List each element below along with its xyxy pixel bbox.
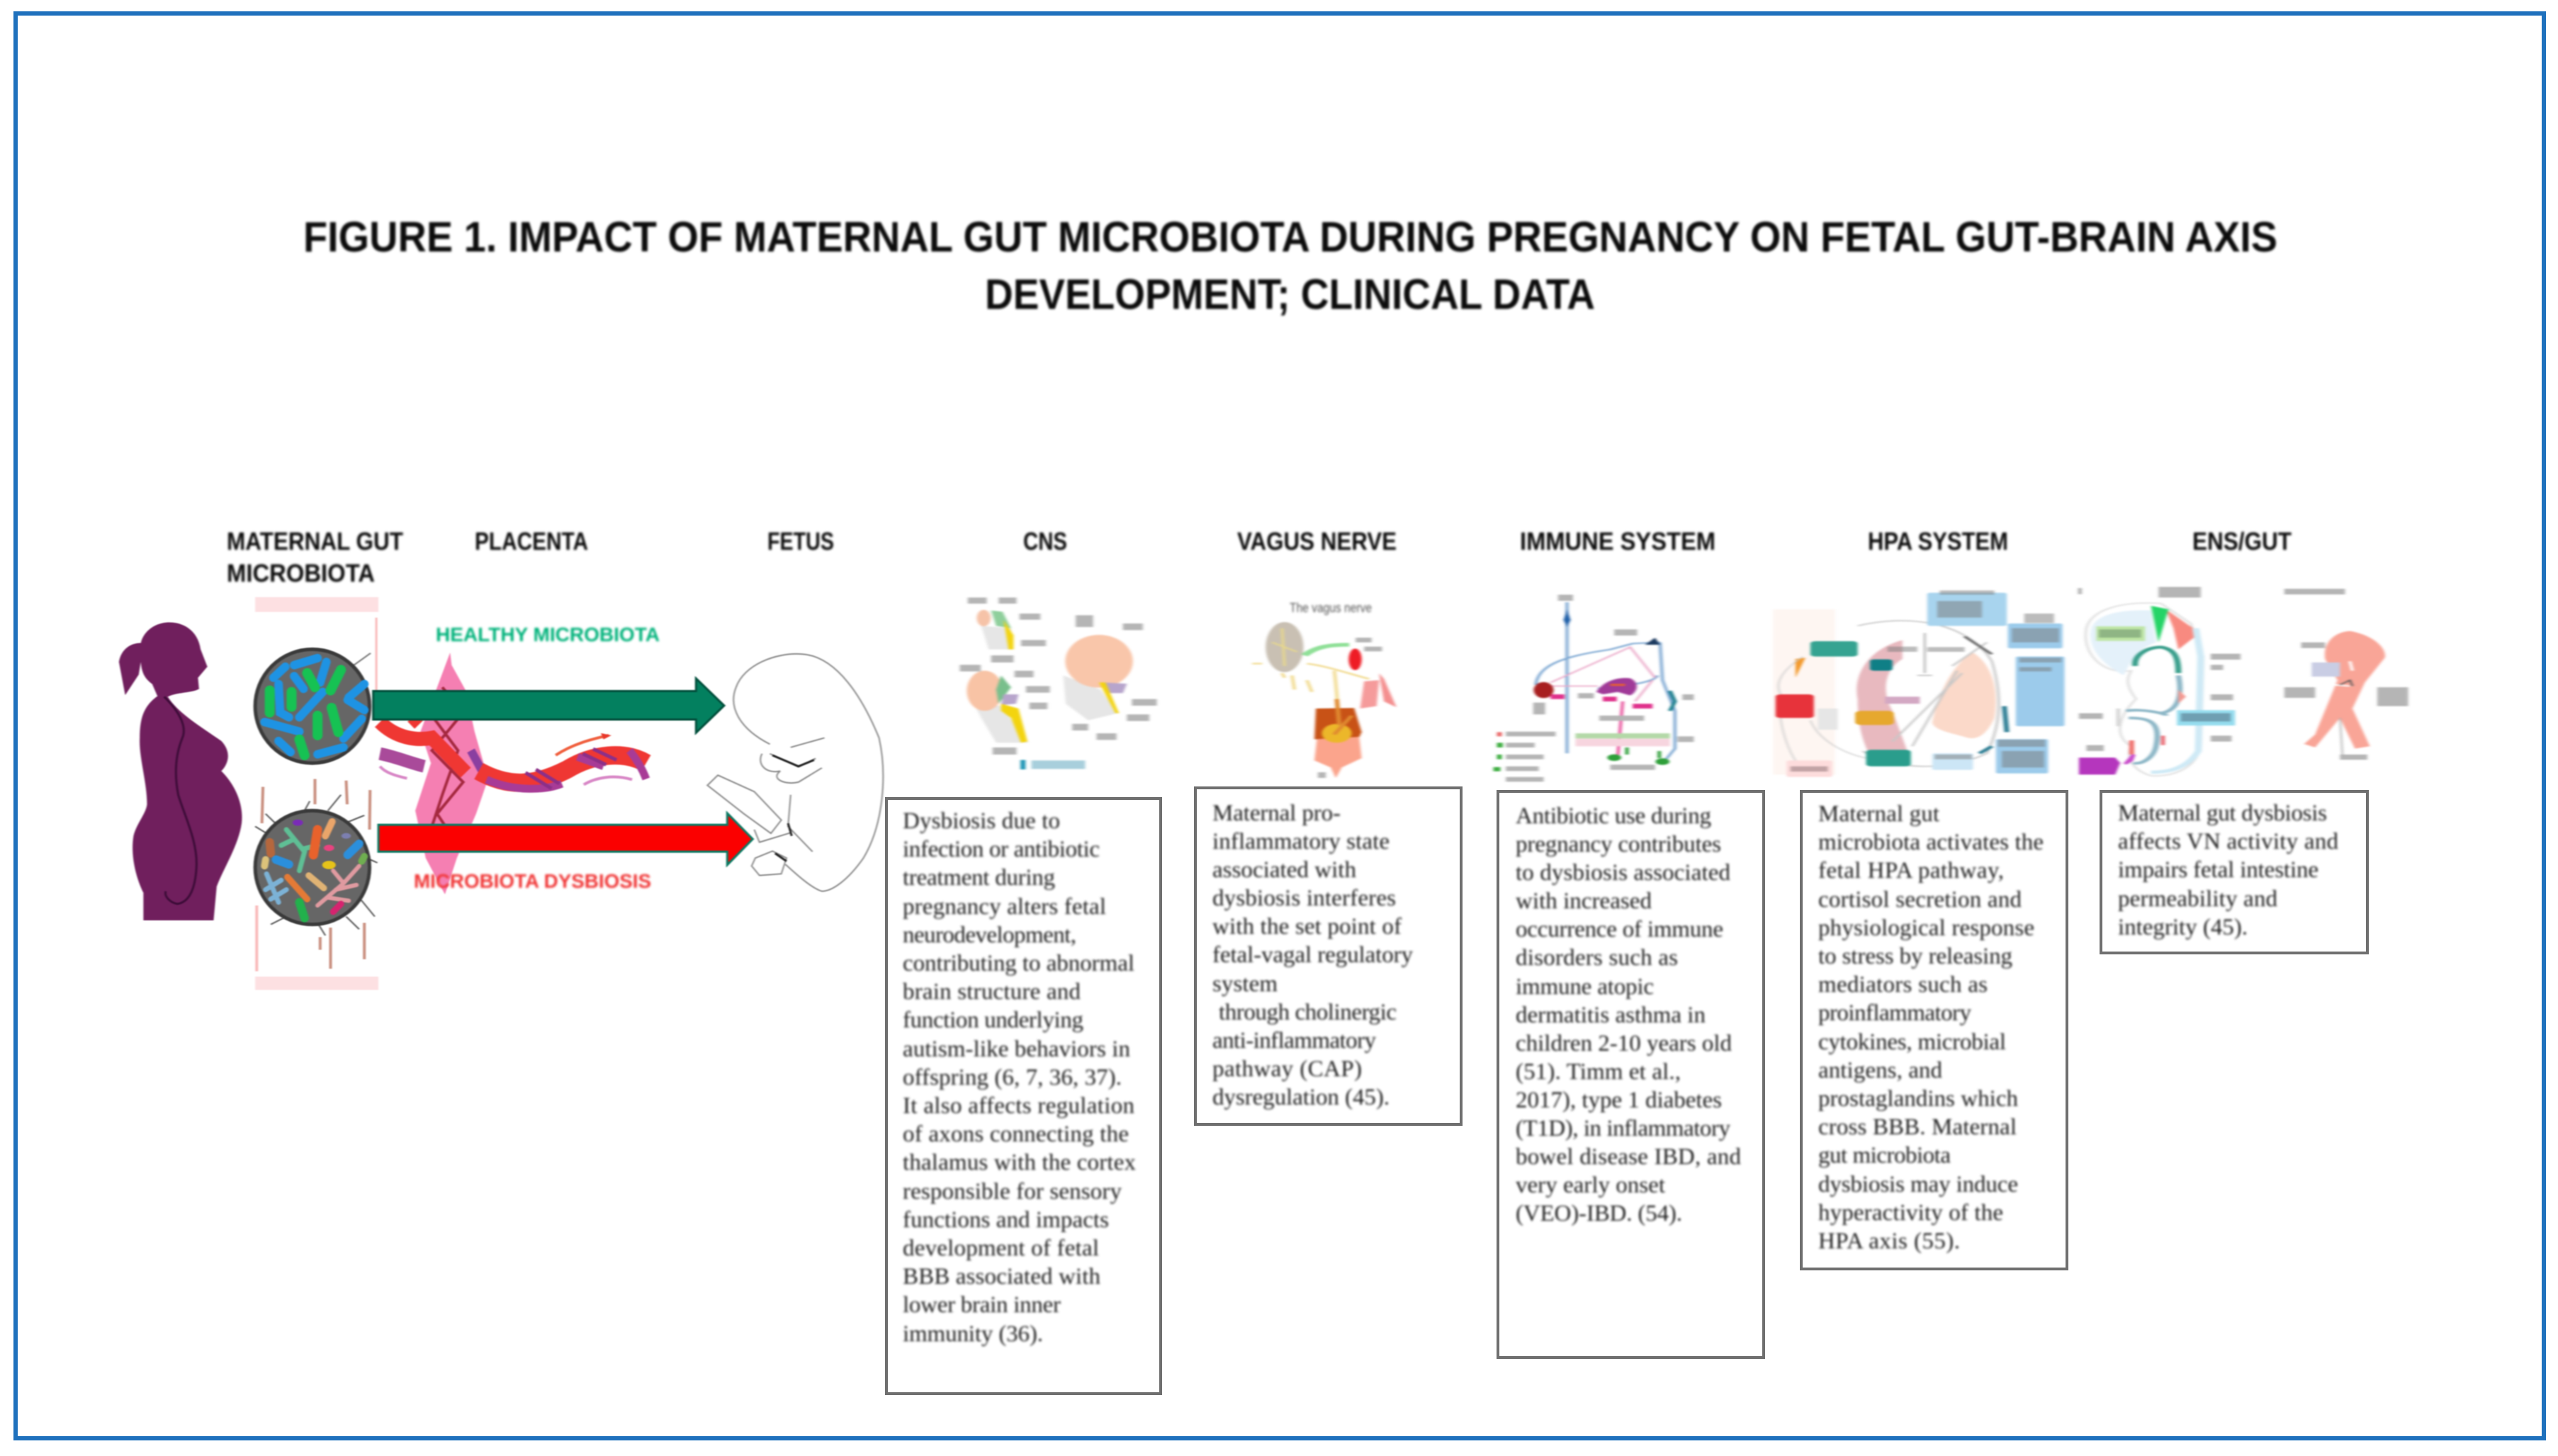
text: immune system findings: children 2-10 years old xyxy=(1516,1031,1732,1056)
illustration: vagus nerve anatomy xyxy=(1252,622,1397,778)
text: immune system findings: bowel disease IBD, and xyxy=(1516,1144,1742,1170)
text: vagus nerve findings: anti-inflammatory xyxy=(1212,1028,1376,1054)
text: CNS findings: lower brain inner xyxy=(903,1292,1061,1318)
icon: dysbiosis microbiota circle xyxy=(255,779,378,969)
text: CNS findings: functions and impacts xyxy=(903,1207,1109,1233)
text: vagus nerve findings: with the set point of xyxy=(1212,914,1402,939)
text: ENS/gut findings: permeability and xyxy=(2118,886,2277,912)
text: vagus nerve findings xyxy=(1212,801,1413,1110)
icon: pink side line lower xyxy=(255,905,258,971)
label: the vagus nerve: The vagus nerve xyxy=(1290,601,1372,615)
icon: fetus outline xyxy=(707,654,883,891)
column headings xyxy=(227,528,2292,587)
text: HPA system findings: to stress by releasing xyxy=(1818,944,2012,969)
text: CNS findings: autism-like behaviors in xyxy=(903,1037,1130,1062)
illustration: ENS and gut development xyxy=(2078,587,2408,776)
column headings: VAGUS NERVE xyxy=(1237,528,1397,555)
text: CNS findings: Dysbiosis due to xyxy=(903,808,1060,834)
title: DEVELOPMENT; CLINICAL DATA xyxy=(985,271,1595,318)
icon: placenta xyxy=(380,653,646,894)
text: vagus nerve findings: dysregulation (45). xyxy=(1212,1085,1390,1110)
text: HPA system findings: microbiota activates the xyxy=(1818,830,2044,855)
column headings: HPA SYSTEM xyxy=(1868,528,2008,555)
text: vagus nerve findings: inflammatory state xyxy=(1212,829,1390,854)
text: CNS findings: of axons connecting the xyxy=(903,1122,1129,1147)
panel: vagus nerve xyxy=(1195,788,1461,1124)
text: HPA system findings: cytokines, microbial xyxy=(1818,1029,2006,1055)
text: HPA system findings: physiological response xyxy=(1818,915,2034,941)
text: immune system findings: occurrence of immune xyxy=(1516,917,1723,942)
text: immune system findings: very early onset xyxy=(1516,1173,1665,1198)
arrow: healthy microbiota xyxy=(373,678,724,733)
text: immune system findings: 2017), type 1 diabetes xyxy=(1516,1088,1722,1113)
text: HPA system findings: cross BBB. Maternal xyxy=(1818,1114,2017,1140)
text: CNS findings xyxy=(903,808,1137,1347)
text: HPA system findings: HPA axis (55). xyxy=(1818,1229,1960,1254)
text: ENS/gut findings: integrity (45). xyxy=(2118,915,2248,940)
text: immune system findings: disorders such as xyxy=(1516,945,1678,971)
text: vagus nerve findings: system xyxy=(1212,971,1278,997)
label: healthy microbiota: HEALTHY MICROBIOTA xyxy=(436,623,660,645)
text: immune system findings: (51). Timm et al., xyxy=(1516,1059,1681,1085)
text: CNS findings: immunity (36). xyxy=(903,1321,1043,1347)
text: immune system findings: (VEO)-IBD. (54). xyxy=(1516,1201,1682,1226)
text: immune system findings: pregnancy contributes xyxy=(1516,832,1721,857)
left illustration: pregnant woman, microbiota, placenta xyxy=(119,597,883,990)
panel: CNS xyxy=(886,798,1161,1394)
text: HPA system findings: prostaglandins which xyxy=(1818,1086,2018,1112)
panel: ENS/gut xyxy=(2101,791,2367,953)
illustration: CNS brain development xyxy=(960,597,1156,769)
column headings: ENS/GUT xyxy=(2192,528,2292,555)
label: microbiota dysbiosis: MICROBIOTA DYSBIOSIS xyxy=(414,870,651,892)
text: HPA system findings: cortisol secretion and xyxy=(1818,887,2022,913)
column headings: PLACENTA xyxy=(475,528,588,555)
text: vagus nerve findings: pathway (CAP) xyxy=(1212,1056,1362,1082)
text: CNS findings: It also affects regulation xyxy=(903,1093,1134,1119)
icon: pink side line upper xyxy=(376,618,378,700)
panel: immune system xyxy=(1498,791,1764,1358)
text: immune system findings: with increased xyxy=(1516,888,1652,914)
text: ENS/gut findings: impairs fetal intestine xyxy=(2118,857,2318,883)
text: CNS findings: contributing to abnormal xyxy=(903,951,1134,976)
text: vagus nerve findings: Maternal pro- xyxy=(1212,801,1341,826)
text: CNS findings: pregnancy alters fetal xyxy=(903,894,1106,920)
title: FIGURE 1. IMPACT OF MATERNAL GUT MICROBIOTA DURING PREGNANCY ON FETAL GUT-BRAIN AXIS xyxy=(303,213,2277,261)
text: immune system findings xyxy=(1516,803,1742,1226)
text: HPA system findings: Maternal gut xyxy=(1818,801,1939,827)
text: CNS findings: function underlying xyxy=(903,1008,1083,1033)
column headings: IMMUNE SYSTEM xyxy=(1520,528,1715,555)
text: HPA system findings: antigens, and xyxy=(1818,1058,1943,1083)
text: immune system findings: Antibiotic use during xyxy=(1516,803,1711,829)
icon: pink band top xyxy=(255,597,378,612)
panel: HPA system xyxy=(1801,791,2067,1269)
icon: pregnant woman silhouette xyxy=(119,622,242,920)
text: HPA system findings: hyperactivity of the xyxy=(1818,1200,2003,1226)
text: immune system findings: dermatitis asthma in xyxy=(1516,1003,1706,1028)
icon: healthy microbiota circle xyxy=(255,649,371,763)
title xyxy=(303,213,2277,318)
text: CNS findings: brain structure and xyxy=(903,979,1081,1005)
text: vagus nerve findings: dysbiosis interferes xyxy=(1212,886,1396,911)
text: CNS findings: responsible for sensory xyxy=(903,1179,1122,1204)
text: HPA system findings: fetal HPA pathway, xyxy=(1818,858,2004,884)
text: CNS findings: offspring (6, 7, 36, 37). xyxy=(903,1065,1122,1090)
illustration: immune system circuit xyxy=(1494,594,1694,781)
text: ENS/gut findings: affects VN activity and xyxy=(2118,829,2338,854)
text: vagus nerve findings: associated with xyxy=(1212,857,1356,883)
text: HPA system findings xyxy=(1818,801,2044,1254)
icon: pink band bottom xyxy=(255,976,378,990)
text: CNS findings: thalamus with the cortex xyxy=(903,1150,1137,1175)
text: ENS/gut findings xyxy=(2118,801,2338,940)
text: HPA system findings: proinflammatory xyxy=(1818,1000,1971,1026)
text: immune system findings: to dysbiosis associated xyxy=(1516,860,1730,886)
text: HPA system findings: gut microbiota xyxy=(1818,1143,1951,1168)
text: immune system findings: (T1D), in inflammatory xyxy=(1516,1116,1730,1141)
text: CNS findings: development of fetal xyxy=(903,1236,1099,1261)
text: CNS findings: infection or antibiotic xyxy=(903,837,1100,862)
column headings: MICROBIOTA xyxy=(227,560,375,587)
text: vagus nerve findings: fetal-vagal regulatory xyxy=(1212,942,1413,968)
arrow: microbiota dysbiosis xyxy=(378,813,753,865)
text: CNS findings: BBB associated with xyxy=(903,1264,1101,1289)
text: HPA system findings: mediators such as xyxy=(1818,972,1988,998)
column headings: MATERNAL GUT xyxy=(227,528,403,555)
text: CNS findings: neurodevelopment, xyxy=(903,922,1076,948)
text: HPA system findings: dysbiosis may induce xyxy=(1818,1172,2018,1197)
illustration: HPA system xyxy=(1773,590,2065,777)
text: immune system findings: immune atopic xyxy=(1516,974,1654,1000)
column headings: CNS xyxy=(1023,528,1067,555)
text: ENS/gut findings: Maternal gut dysbiosis xyxy=(2118,801,2327,826)
text: vagus nerve findings: through cholinergic xyxy=(1219,1000,1397,1025)
column headings: FETUS xyxy=(767,528,834,555)
text: CNS findings: treatment during xyxy=(903,865,1055,891)
